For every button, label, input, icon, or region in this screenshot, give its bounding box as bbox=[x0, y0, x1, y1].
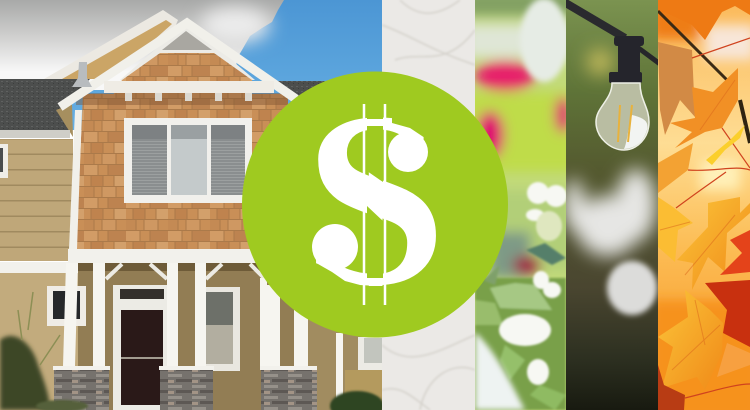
panel: autumn leaves strip bbox=[650, 0, 750, 410]
bottom red leaf bbox=[658, 365, 685, 410]
left lower window bbox=[47, 286, 86, 326]
gable infill bbox=[120, 28, 255, 80]
vent bbox=[162, 31, 212, 50]
dollar sign: $ bbox=[306, 60, 444, 337]
left shrub bbox=[0, 292, 88, 410]
yellow leaf left bbox=[658, 197, 693, 262]
right roof bbox=[278, 81, 325, 96]
upper left siding bbox=[0, 139, 73, 261]
main gable shingles bbox=[114, 53, 252, 94]
lower right leaf bbox=[717, 343, 750, 377]
panel: garden flowers strip bbox=[475, 0, 566, 410]
bark lines bbox=[382, 0, 475, 410]
leaf canopy top bbox=[658, 0, 750, 40]
cross trim bbox=[104, 81, 274, 93]
blurred white bud bbox=[520, 0, 568, 82]
brown hanging leaf bbox=[658, 42, 695, 135]
right shrub bbox=[330, 391, 384, 410]
upper window bbox=[124, 118, 252, 203]
small side window bbox=[0, 144, 8, 178]
cable bbox=[564, 2, 625, 38]
roof vent pipe bbox=[72, 62, 92, 87]
rafter ends bbox=[125, 93, 252, 101]
sky bbox=[72, 0, 382, 130]
porch columns bbox=[63, 263, 343, 398]
porch window bbox=[206, 287, 240, 371]
lower golden leaf bbox=[658, 290, 723, 390]
bokeh bbox=[564, 49, 656, 256]
bulb socket bbox=[609, 36, 644, 83]
twig lines bbox=[676, 38, 750, 398]
white flowers bbox=[499, 182, 567, 385]
counter shaping bbox=[308, 98, 436, 308]
upper shingle wall bbox=[76, 94, 288, 249]
cloud highlight bbox=[200, 7, 270, 43]
vertical trim bbox=[69, 110, 82, 249]
green circle badge bbox=[242, 60, 508, 338]
green foliage bbox=[475, 243, 566, 410]
soffit bbox=[56, 104, 73, 137]
panel: house photo bbox=[0, 0, 384, 410]
left leaf bbox=[658, 143, 693, 193]
door bbox=[113, 285, 167, 410]
dollar bars bbox=[364, 104, 385, 305]
back gable bbox=[44, 10, 178, 79]
lower wall bbox=[0, 273, 78, 410]
branch bbox=[658, 11, 727, 80]
panel: white bark strip bbox=[382, 0, 475, 410]
left roof bbox=[0, 79, 90, 130]
big golden leaf bbox=[677, 197, 750, 290]
panel: light bulb strip bbox=[564, 0, 660, 410]
bright bokeh ball bbox=[607, 261, 657, 315]
porch brackets bbox=[106, 264, 265, 279]
yellow sprig bbox=[706, 125, 745, 165]
leaf veins bbox=[660, 80, 735, 370]
cloud bbox=[0, 0, 284, 90]
red leaf right bbox=[720, 230, 750, 275]
stone bases bbox=[53, 366, 317, 410]
white foreground blur bbox=[475, 332, 525, 410]
bulb glass bbox=[596, 83, 649, 150]
eave trim bbox=[0, 130, 70, 138]
orange leaf upper bbox=[670, 68, 738, 148]
horizontal porch beam bbox=[68, 249, 260, 263]
dollar terminals bbox=[312, 132, 428, 270]
right lower window bbox=[358, 337, 382, 370]
gable trim bbox=[60, 23, 296, 107]
deep red leaf bbox=[705, 280, 750, 347]
